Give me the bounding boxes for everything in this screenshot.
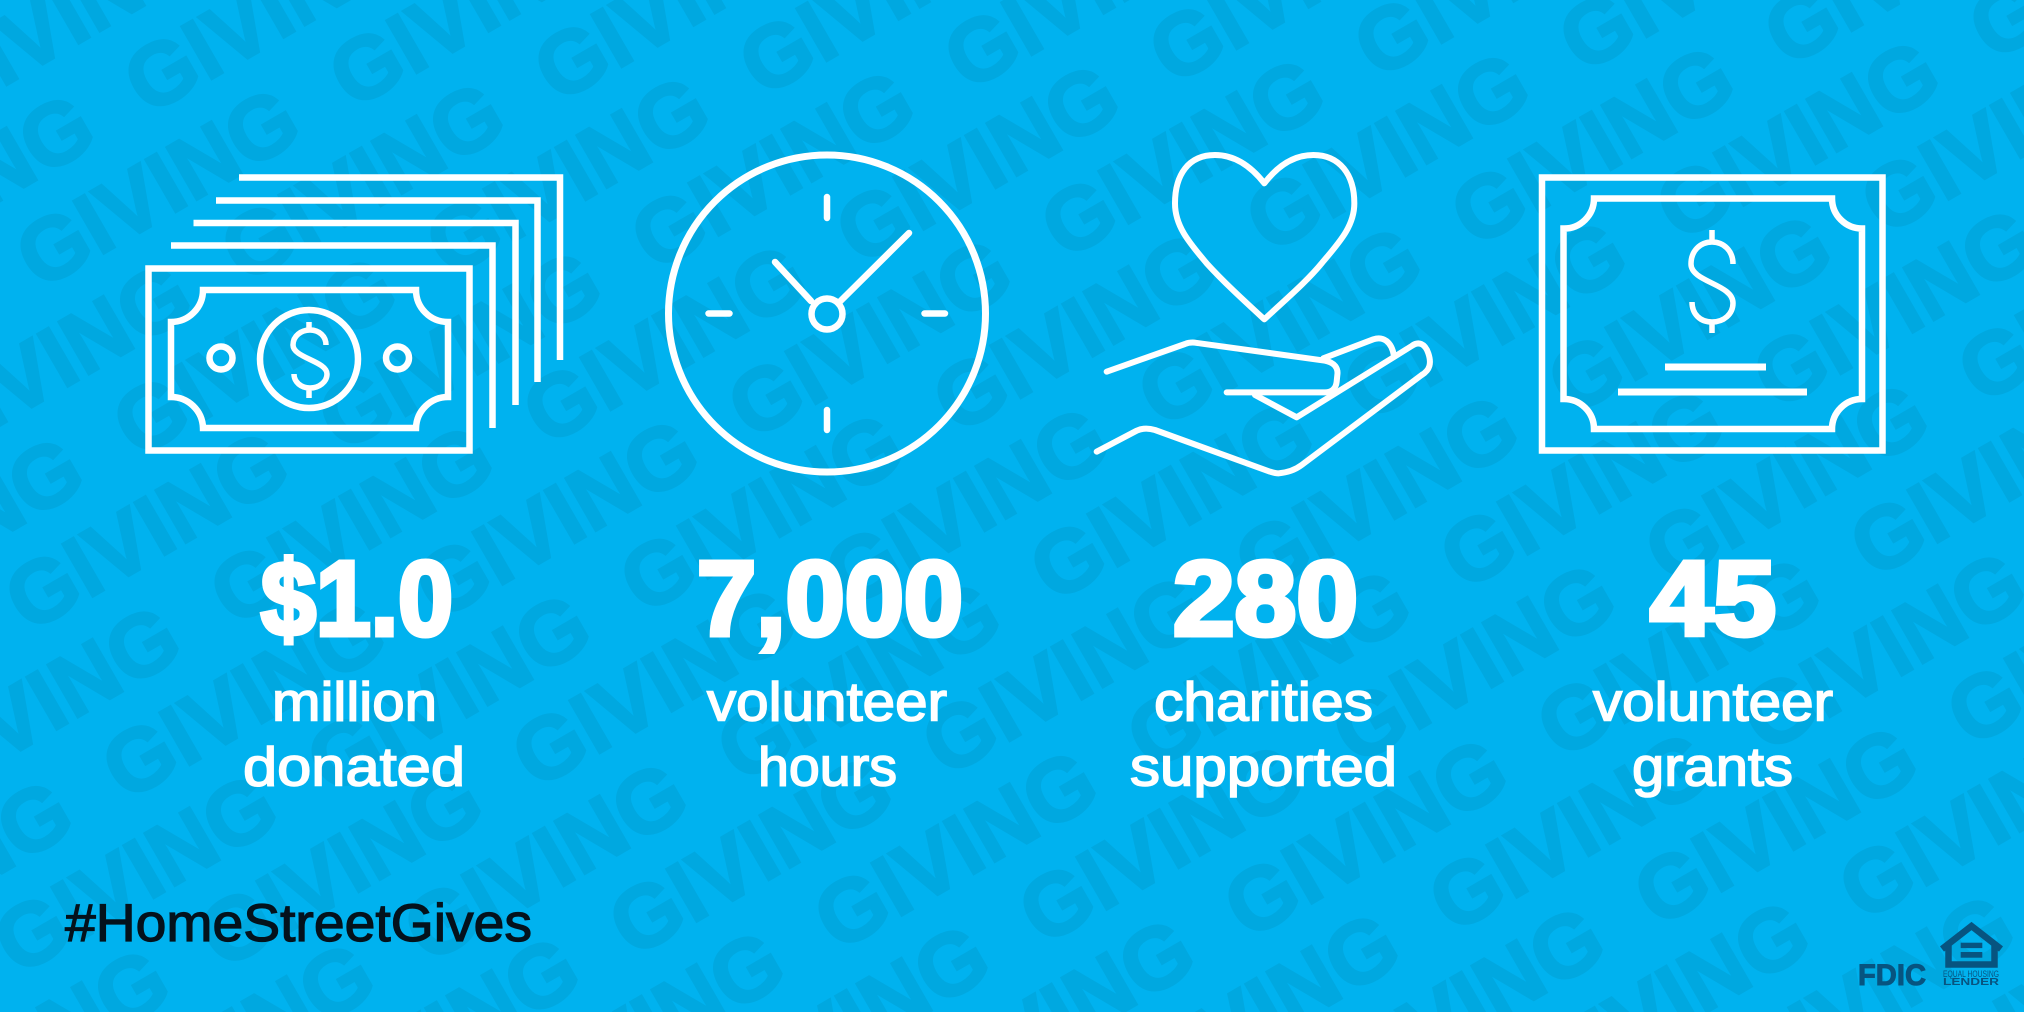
text: GIVING <box>1531 194 1848 434</box>
stat: $1.0 million donated <box>243 540 465 798</box>
text: GIVING <box>387 741 704 981</box>
stat: 45 volunteer grants: volunteer <box>1593 670 1833 732</box>
text: GIVING <box>1229 31 1546 271</box>
text: GIVING <box>711 218 1028 458</box>
text: GIVING <box>1628 362 1945 602</box>
stat: 280 charities supported: supported <box>1130 736 1397 798</box>
text: GIVING <box>1520 537 1837 777</box>
text: GIVING <box>1617 705 1934 945</box>
stat: 45 volunteer grants: grants <box>1632 736 1793 798</box>
text: GIVING <box>204 61 521 301</box>
stat: 280 charities supported: 280 <box>1173 540 1358 658</box>
text: GIVING <box>1218 374 1535 614</box>
text: GIVING <box>1639 19 1956 259</box>
icon: heart above open hand <box>1097 155 1430 473</box>
logo: FDIC: FDIC <box>1858 959 1926 992</box>
text: GIVING <box>290 573 607 813</box>
stat: $1.0 million donated: $1.0 <box>261 540 453 658</box>
stat: 7,000 volunteer hours: volunteer <box>707 670 947 732</box>
text: GIVING <box>797 729 1114 969</box>
text: GIVING <box>495 567 812 807</box>
text: GIVING <box>1121 206 1438 446</box>
text: GIVING <box>182 747 499 987</box>
text: GIVING <box>1013 380 1330 620</box>
text: GIVING <box>603 392 920 632</box>
stat: 7,000 volunteer hours: hours <box>758 736 897 798</box>
text: GIVING <box>1412 711 1729 951</box>
text: GIVING <box>409 55 726 295</box>
hashtag: #HomeStreetGives <box>65 894 532 953</box>
stat: $1.0 million donated: million <box>272 670 437 732</box>
text: GIVING <box>1326 200 1643 440</box>
text: GIVING <box>1110 549 1427 789</box>
stat: 45 volunteer grants: 45 <box>1650 540 1776 658</box>
text: GIVING <box>1423 368 1740 608</box>
text: GIVING <box>819 43 1136 283</box>
logo: equal housing lender: LENDER <box>1943 976 2000 988</box>
text: GIVING <box>1434 25 1751 265</box>
text: GIVING <box>700 561 1017 801</box>
icon: grant certificate <box>1542 178 1882 450</box>
text: GIVING <box>1002 723 1319 963</box>
text: GIVING <box>905 555 1222 795</box>
text: GIVING <box>1315 543 1632 783</box>
text: GIVING <box>193 404 510 644</box>
logo: equal housing lender <box>1942 926 2001 988</box>
stat: 45 volunteer grants <box>1593 540 1833 798</box>
text: GIVING <box>0 67 316 307</box>
stat: 280 charities supported: charities <box>1154 670 1373 732</box>
icon: clock <box>668 155 986 472</box>
text: GIVING <box>85 579 402 819</box>
text: GIVING <box>614 49 931 289</box>
icon: stack of banknotes <box>148 178 560 450</box>
text: GIVING <box>916 212 1233 452</box>
text: GIVING <box>398 398 715 638</box>
stat: $1.0 million donated: donated <box>243 736 465 798</box>
logo: equal housing lender: EQUAL HOUSING <box>1943 969 1999 980</box>
stat: 7,000 volunteer hours <box>697 540 963 798</box>
text: GIVING <box>592 735 909 975</box>
text: GIVING <box>1207 717 1524 957</box>
stat: 280 charities supported <box>1130 540 1397 798</box>
text: GIVING <box>96 236 413 476</box>
text: GIVING <box>1024 37 1341 277</box>
text: GIVING <box>808 386 1125 626</box>
stat: 7,000 volunteer hours: 7,000 <box>697 540 963 658</box>
text: GIVING <box>301 230 618 470</box>
text: GIVING <box>506 224 823 464</box>
